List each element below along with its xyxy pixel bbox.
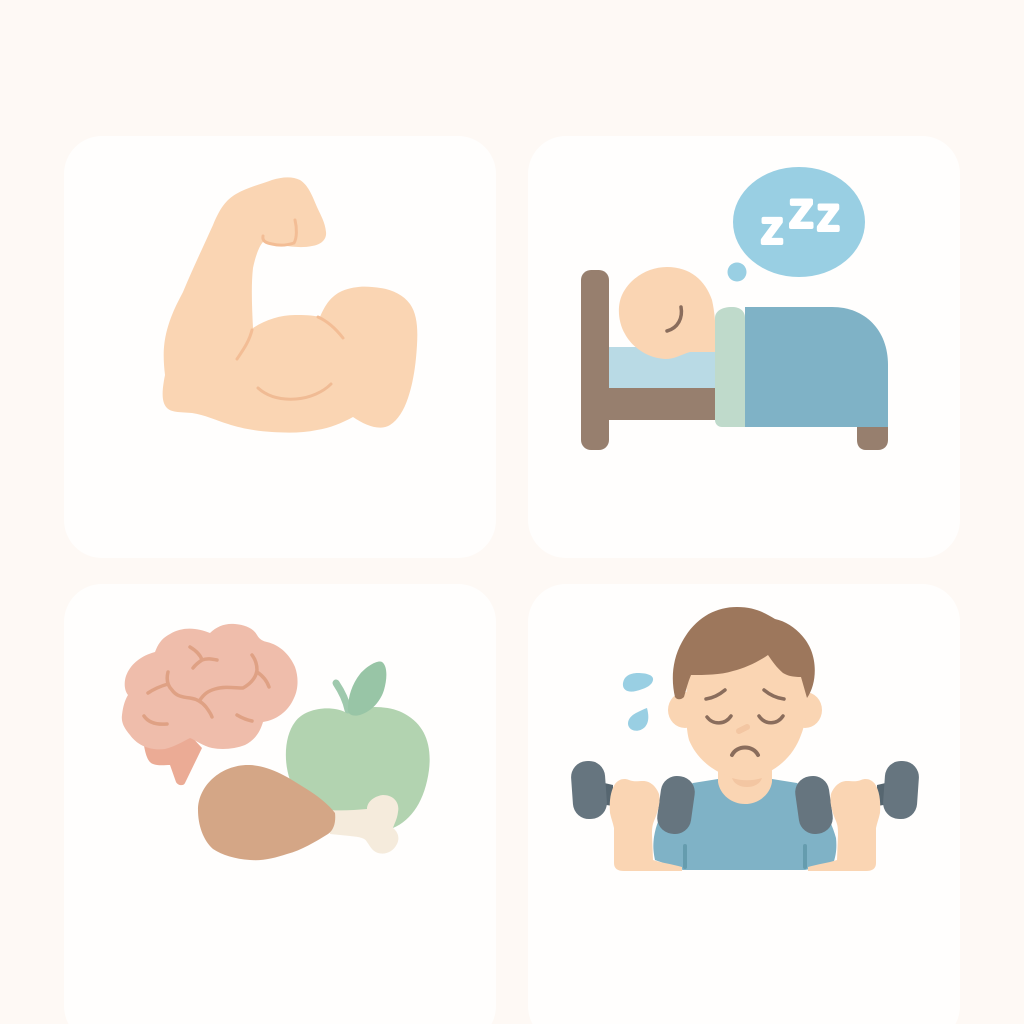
icon: flexed bicep arm — [163, 177, 417, 433]
icon: left arm and fist — [610, 779, 682, 871]
icon: speech bubble with zzz — [728, 167, 865, 282]
icon: speech bubble with zzz: z — [789, 182, 814, 238]
icon: left dumbbell — [570, 760, 697, 836]
icon: green apple — [286, 662, 430, 828]
panel: nutrition — [64, 584, 496, 1024]
panel: flexed arm — [64, 136, 496, 558]
panel: sleep — [528, 136, 960, 558]
icon: sweat drops — [623, 673, 653, 731]
panel: tired lifter — [528, 584, 960, 1024]
icon: tired person lifting dumbbells — [570, 607, 920, 871]
icon: speech bubble with zzz: z — [817, 188, 840, 240]
icon: right arm and fist — [808, 779, 880, 871]
icon: chicken drumstick — [198, 765, 398, 860]
icon: right dumbbell — [793, 760, 920, 836]
icon: bed with sleeping person — [581, 167, 888, 450]
icon: speech bubble with zzz: z — [761, 202, 784, 253]
icon: brain — [122, 624, 298, 785]
